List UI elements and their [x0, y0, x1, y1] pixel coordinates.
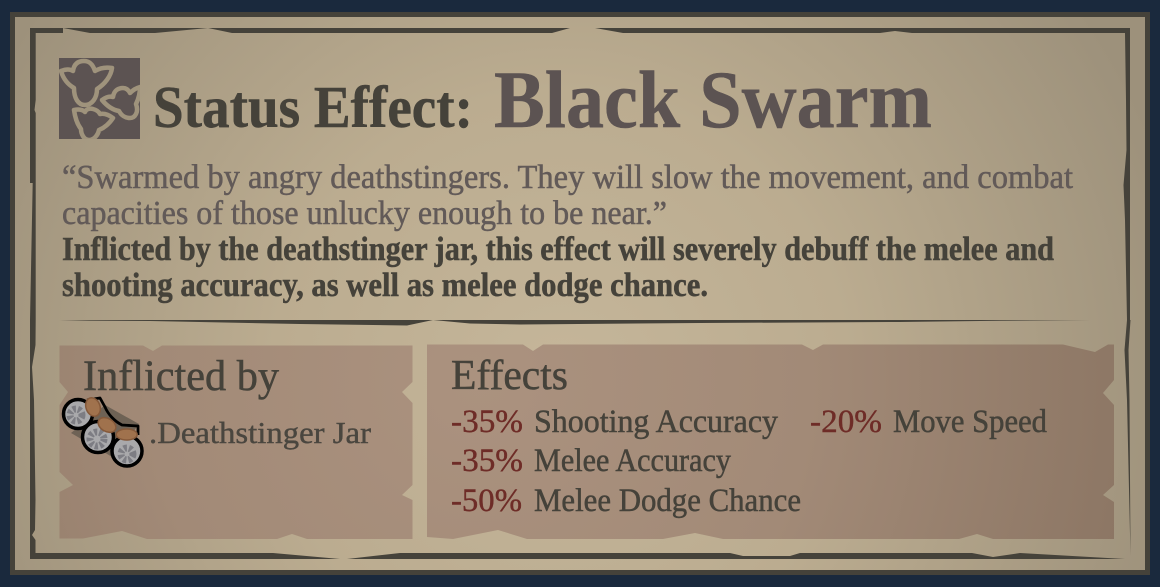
heading: inflicted by: Inflicted by [83, 353, 279, 400]
icon: deathstinger jar [64, 396, 142, 466]
heading: effects: Effects [451, 353, 568, 399]
effect: move speed [810, 404, 1047, 440]
flavor quote: capacities of those unlucky enough to be near.” [62, 195, 667, 232]
panel: inflicted by [60, 346, 412, 539]
flavor quote: “Swarmed by angry deathstingers. They will slow the movement, and combat [62, 159, 1074, 196]
title [153, 54, 932, 145]
effect: melee dodge chance: -50% [451, 483, 522, 519]
effect: shooting accuracy: Shooting Accuracy [534, 404, 778, 440]
icon: status effect bees [59, 58, 140, 140]
effect: melee dodge chance: Melee Dodge Chance [534, 483, 801, 519]
effect: move speed: Move Speed [893, 404, 1047, 440]
panel: effects [427, 344, 1114, 539]
item name: .Deathstinger Jar [149, 415, 372, 450]
divider [59, 320, 1090, 326]
flavor quote [62, 159, 1074, 232]
effect: melee accuracy: -35% [451, 443, 523, 479]
effect: melee accuracy: Melee Accuracy [534, 443, 731, 479]
effect: shooting accuracy: -35% [451, 404, 523, 440]
effect: move speed: -20% [810, 404, 882, 440]
effect: melee accuracy [451, 443, 731, 479]
title: Black Swarm [494, 54, 932, 145]
title: Status Effect: [153, 74, 473, 140]
description [62, 231, 1054, 304]
description: shooting accuracy, as well as melee dodge chance. [62, 267, 708, 304]
description: Inflicted by the deathstinger jar, this effect will severely debuff the melee and [62, 231, 1054, 268]
